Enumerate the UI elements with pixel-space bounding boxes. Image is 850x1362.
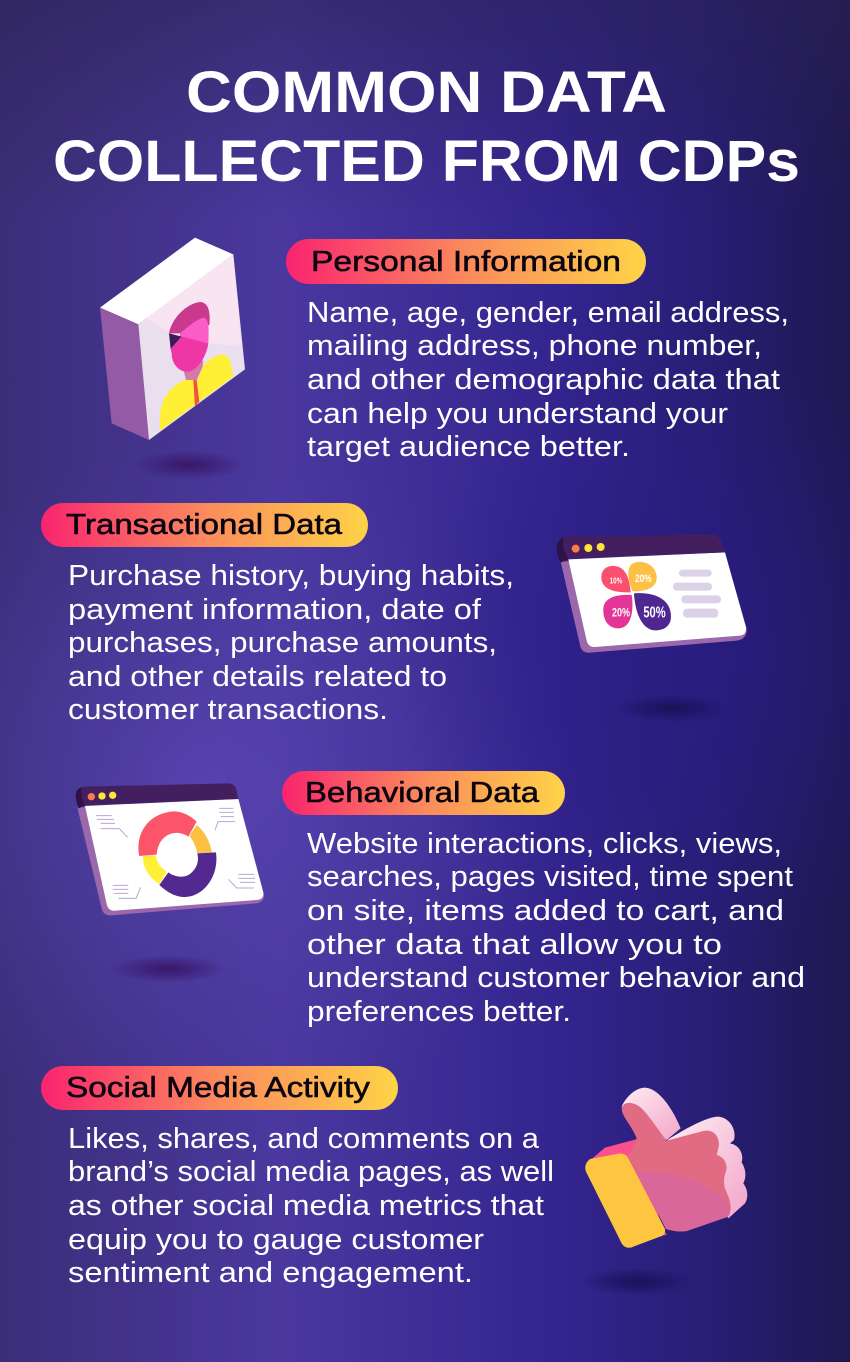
label pill: transactional data bbox=[41, 503, 368, 547]
label pill: behavioral data bbox=[282, 771, 565, 815]
label pill: social media activity bbox=[41, 1066, 398, 1110]
text: behavioral data: preferences better. bbox=[307, 996, 571, 1028]
text: social media activity: Likes, shares, and comments on a bbox=[68, 1123, 539, 1155]
text: social media activity: as other social media metrics that bbox=[68, 1190, 544, 1222]
section: transactional data bbox=[41, 503, 514, 726]
icon: pie chart window: 50% bbox=[643, 604, 666, 621]
text: social media activity: brand’s social media pages, as well bbox=[68, 1156, 554, 1188]
text: behavioral data bbox=[307, 828, 805, 1028]
text: transactional data: Purchase history, buying habits, bbox=[68, 560, 514, 592]
label pill: personal information bbox=[286, 239, 646, 284]
text: personal information: Name, age, gender, email address, bbox=[307, 297, 789, 329]
text: social media activity: sentiment and engagement. bbox=[68, 1257, 473, 1289]
icon: pie chart window: 10% bbox=[610, 575, 623, 585]
icon: pie chart window: 20% bbox=[635, 573, 652, 585]
text: behavioral data: understand customer behavior and bbox=[307, 962, 805, 994]
title: COLLECTED FROM CDPs bbox=[53, 129, 800, 194]
label pill: personal information: Personal Information bbox=[311, 246, 621, 278]
text: personal information: target audience better. bbox=[307, 431, 630, 463]
text: social media activity: equip you to gauge customer bbox=[68, 1224, 485, 1256]
title bbox=[53, 60, 800, 194]
text: behavioral data: on site, items added to cart, and bbox=[307, 895, 784, 927]
label pill: behavioral data: Behavioral Data bbox=[305, 777, 539, 809]
text: behavioral data: searches, pages visited, time spent bbox=[307, 861, 793, 893]
text: personal information: and other demographic data that bbox=[307, 364, 780, 396]
text: behavioral data: other data that allow you to bbox=[307, 929, 722, 961]
text: transactional data: purchases, purchase amounts, bbox=[68, 627, 497, 659]
text: transactional data: customer transactions. bbox=[68, 694, 388, 726]
text: transactional data bbox=[68, 560, 514, 726]
title: COMMON DATA bbox=[186, 60, 667, 125]
icon: pie chart window bbox=[557, 534, 747, 722]
text: personal information: can help you understand your bbox=[307, 398, 729, 430]
section: social media activity bbox=[41, 1066, 554, 1289]
icon: donut chart window bbox=[76, 783, 264, 983]
label pill: social media activity: Social Media Activity bbox=[66, 1072, 371, 1104]
text: transactional data: payment information, date of bbox=[68, 594, 481, 626]
text: personal information bbox=[307, 297, 789, 463]
icon: personal profile box bbox=[100, 238, 245, 480]
section: behavioral data bbox=[282, 771, 805, 1028]
section: personal information bbox=[286, 239, 789, 463]
text: transactional data: and other details related to bbox=[68, 661, 447, 693]
text: behavioral data: Website interactions, clicks, views, bbox=[307, 828, 782, 860]
text: social media activity bbox=[68, 1123, 554, 1289]
icon: thumbs up bbox=[582, 1088, 747, 1296]
icon: pie chart window: 20% bbox=[612, 606, 630, 620]
text: personal information: mailing address, phone number, bbox=[307, 330, 762, 362]
label pill: transactional data: Transactional Data bbox=[66, 509, 342, 541]
